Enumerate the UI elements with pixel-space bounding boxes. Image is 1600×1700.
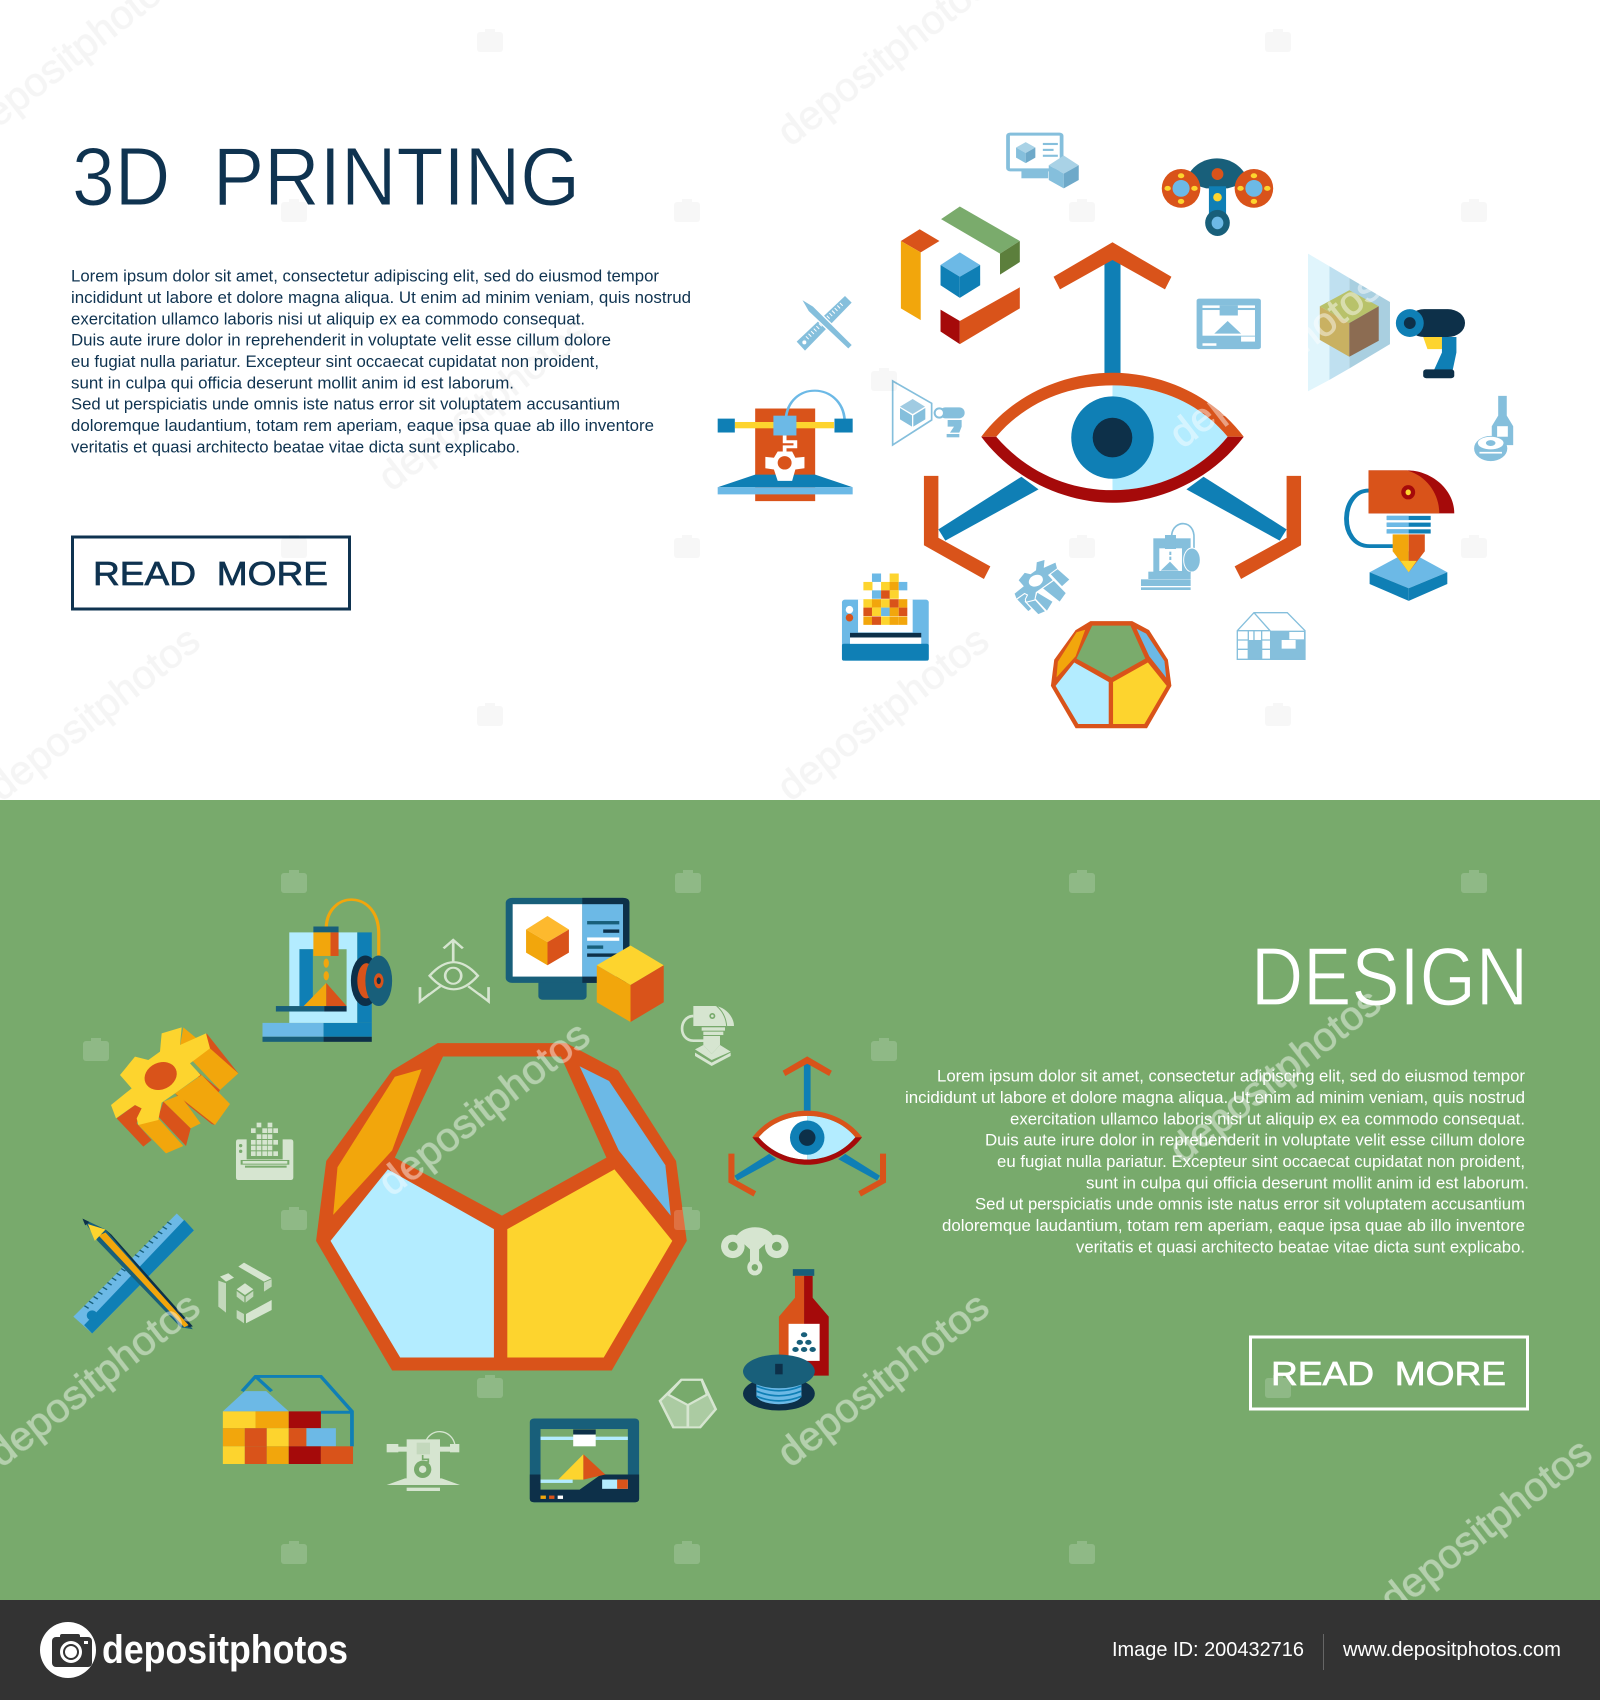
text block: green paragraph: doloremque laudantium, totam rem aperiam, eaque ipsa quae ab illo inventore — [942, 1216, 1525, 1235]
button: read more (green): READ MORE — [1271, 1356, 1506, 1393]
text block: top paragraph: exercitation ullamco laboris nisi ut aliquip ex ea commodo consequat. — [71, 309, 585, 328]
icon: blocks house — [223, 1376, 353, 1464]
website url: www.depositphotos.com — [1342, 1639, 1561, 1661]
icon: bottle and spool (pale) — [1474, 396, 1513, 461]
text block: top paragraph: doloremque laudantium, totam rem aperiam, eaque ipsa quae ab illo inventore — [71, 416, 654, 435]
watermark: depositphotos pattern: depositphotos — [769, 1284, 997, 1476]
icon: dodecahedron (colour) — [1051, 621, 1171, 728]
icon: tracker (pale) — [721, 1227, 789, 1275]
icon: monitor with cube — [506, 898, 664, 1022]
watermark: depositphotos pattern: depositphotos — [1161, 980, 1389, 1172]
watermark: depositphotos pattern: depositphotos — [769, 618, 997, 810]
panel: green design background — [0, 800, 1600, 1600]
icon: crossed ruler and pencil (pale) — [797, 296, 853, 351]
text block: green paragraph: Lorem ipsum dolor sit amet, consectetur adipiscing elit, sed do eiusmod tempor — [937, 1067, 1525, 1086]
button: read more (top): READ MORE — [93, 556, 328, 593]
icon: camera logo — [40, 1622, 96, 1678]
heading: DESIGN: DESIGN — [1251, 930, 1528, 1023]
heading: 3D PRINTING: 3D PRINTING — [72, 130, 580, 223]
icon: dodecahedron (pale) — [660, 1380, 716, 1427]
icon: printer with gear (pale) — [387, 1432, 460, 1491]
image id: Image ID: 200432716 — [1112, 1639, 1304, 1661]
icon: eye with axes (pale) — [420, 940, 489, 1001]
text block: green paragraph — [905, 1067, 1529, 1256]
icon: small scanner (pale) — [893, 381, 965, 445]
icon: scanner with translucent cube — [1308, 254, 1465, 391]
logo text: depositphotos — [102, 1628, 348, 1672]
watermark: depositphotos pattern: depositphotos — [370, 1013, 598, 1205]
icon: nozzle on block — [1347, 470, 1454, 601]
text block: green paragraph: incididunt ut labore et dolore magna aliqua. Ut enim ad minim veniam, quis nostrud — [905, 1088, 1525, 1107]
icon: pencil and ruler — [73, 1214, 194, 1334]
button: read more (top) — [72, 537, 350, 609]
text block: top paragraph: sunt in culpa qui officia deserunt mollit anim id est laborum. — [71, 373, 514, 392]
icon: cube frame (pale) — [218, 1263, 272, 1323]
icon: pixel printer (pale) — [236, 1123, 293, 1180]
icon: 3D printer with spool — [262, 900, 392, 1042]
watermark: depositphotos pattern: depositphotos — [1161, 265, 1389, 457]
text block: top paragraph — [71, 267, 691, 456]
icon: bottle and spool — [743, 1269, 829, 1411]
text block: green paragraph: veritatis et quasi architecto beatae vitae dicta sunt explicabo. — [1076, 1237, 1525, 1256]
icon: tablet printer — [530, 1419, 639, 1502]
text block: top paragraph: veritatis et quasi architecto beatae vitae dicta sunt explicabo. — [71, 437, 520, 456]
icon: eye with axes (colour) — [728, 1056, 886, 1196]
text block: green paragraph: Duis aute irure dolor in reprehenderit in voluptate velit esse cillum dolore — [985, 1131, 1525, 1150]
icon: house outline (pale) — [1237, 613, 1305, 659]
icon: central eye with axes — [924, 242, 1301, 579]
text block: green paragraph: Sed ut perspiciatis unde omnis iste natus error sit voluptatem accusantium — [975, 1195, 1525, 1214]
icon: tracker — [1162, 158, 1273, 236]
icon: gear (pale) — [1014, 559, 1070, 615]
icon: cube frame — [901, 206, 1020, 344]
icon: monitor with cube (pale) — [1008, 134, 1079, 188]
text block: top paragraph: Lorem ipsum dolor sit amet, consectetur adipiscing elit, sed do eiusmod tempor — [71, 267, 659, 286]
icon: pixel printer — [842, 574, 929, 661]
icon: printer with gear — [718, 391, 853, 501]
text block: top paragraph: Sed ut perspiciatis unde omnis iste natus error sit voluptatem accusantium — [71, 395, 620, 414]
watermark: depositphotos pattern: depositphotos — [1372, 1430, 1600, 1622]
icon: tablet printer (pale) — [1197, 299, 1261, 349]
watermark: depositphotos pattern: depositphotos — [370, 308, 598, 500]
text block: green paragraph: eu fugiat nulla pariatur. Excepteur sint occaecat cupidatat non proident, — [997, 1152, 1525, 1171]
text block: green paragraph: exercitation ullamco laboris nisi ut aliquip ex ea commodo consequat. — [1010, 1109, 1525, 1128]
icon: gear — [111, 1027, 238, 1153]
icon: nozzle (pale) — [682, 1006, 734, 1066]
icon: small printer (pale) — [1141, 524, 1200, 590]
panel: footer bar — [0, 1600, 1600, 1700]
text block: top paragraph: eu fugiat nulla pariatur. Excepteur sint occaecat cupidatat non proident, — [71, 352, 599, 371]
button: read more (green) — [1250, 1337, 1528, 1409]
panel: green icon cluster — [73, 898, 886, 1502]
text block: top paragraph: Duis aute irure dolor in reprehenderit in voluptate velit esse cillum dolore — [71, 331, 611, 350]
text block: green paragraph: sunt in culpa qui officia deserunt mollit anim id est laborum. — [1086, 1173, 1529, 1192]
text block: top paragraph: incididunt ut labore et dolore magna aliqua. Ut enim ad minim veniam, quis nostrud — [71, 288, 691, 307]
panel: top icon cluster — [718, 134, 1513, 728]
icon: dodecahedron (large) — [316, 1043, 687, 1371]
